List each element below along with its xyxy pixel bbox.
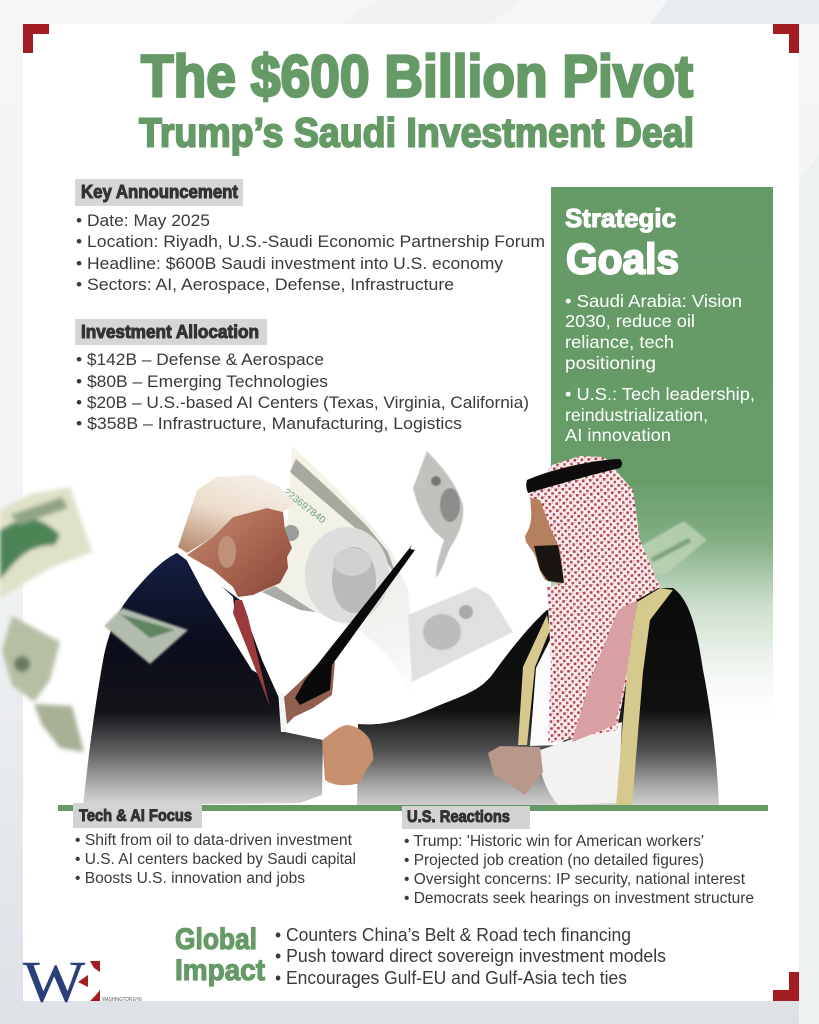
list: key announcement items: • Headline: $600B Saudi investment into U.S. economy xyxy=(76,255,504,273)
list: tech and ai items xyxy=(75,832,356,887)
list: us reactions items: • Trump: 'Historic win for American workers' xyxy=(404,833,704,850)
photo: saudi figure xyxy=(357,456,719,806)
figure: hair xyxy=(178,475,295,553)
list: investment allocation items: • $142B – Defense & Aerospace xyxy=(76,351,324,369)
green divider bar xyxy=(58,805,768,811)
small note over jacket xyxy=(104,608,188,664)
heading: key announcement xyxy=(75,179,243,206)
text: us goals: • U.S.: Tech leadership, xyxy=(565,384,755,404)
heading: tech and ai focus xyxy=(73,803,202,828)
subtitle: Trump’s Saudi Investment Deal xyxy=(139,110,694,156)
list: key announcement items: • Date: May 2025 xyxy=(76,212,210,230)
bill: top right note xyxy=(413,451,463,578)
heading: key announcement: Key Announcement xyxy=(81,182,238,202)
panel: us reactions xyxy=(402,806,754,907)
list: tech and ai items: • Shift from oil to data-driven investment xyxy=(75,832,353,849)
figure: red tie xyxy=(233,600,270,707)
heading: strategic goals: Goals xyxy=(566,236,679,284)
figure: shirt and collar xyxy=(185,557,257,673)
figure: ear xyxy=(218,536,236,568)
heading: global impact: Global xyxy=(175,923,257,956)
list: investment allocation items xyxy=(76,351,529,433)
figure: black robe and arm xyxy=(357,588,719,806)
figure: gold trim left xyxy=(518,615,550,745)
list: tech and ai items: • U.S. AI centers backed by Saudi capital xyxy=(75,851,356,868)
figure: hand xyxy=(488,746,543,795)
heading: strategic goals xyxy=(565,203,679,284)
figure: shemagh headdress xyxy=(527,456,660,743)
heading: us reactions: U.S. Reactions xyxy=(407,807,510,826)
figure: hand holding folder xyxy=(284,662,335,724)
text: us goals: reindustrialization, xyxy=(565,405,708,425)
heading: tech and ai focus: Tech & AI Focus xyxy=(79,806,192,825)
bill: large hundred dollar note: 223697840 xyxy=(281,487,328,526)
corner bracket: bottom right xyxy=(773,972,799,1001)
logo: washington eye: WASHINGTON EYE xyxy=(102,997,143,1003)
photo: flying dollar bills xyxy=(0,446,707,752)
corner bracket: top right xyxy=(773,24,799,53)
text: saudi goals: reliance, tech xyxy=(565,332,674,352)
panel: key announcement xyxy=(75,179,545,294)
heading: global impact xyxy=(175,923,265,987)
bill: bottom left blurred note xyxy=(34,704,84,752)
panel: strategic goals xyxy=(551,187,773,720)
list: us reactions items: • Democrats seek hearings on investment structure xyxy=(404,890,754,907)
list: us reactions items: • Oversight concerns: IP security, national interest xyxy=(404,871,746,888)
figure: folder xyxy=(295,545,415,705)
corner bracket: top left xyxy=(23,24,49,53)
heading: global impact: Impact xyxy=(175,954,265,987)
text: saudi goals: 2030, reduce oil xyxy=(565,311,695,331)
list: global impact items: • Push toward direct sovereign investment models xyxy=(275,946,666,966)
panel: tech and ai focus xyxy=(73,803,356,887)
text: saudi goals xyxy=(565,291,742,373)
figure: shemagh stripe band xyxy=(572,588,660,742)
text: us goals: AI innovation xyxy=(565,425,671,445)
figure: black agal headband xyxy=(526,459,622,493)
bill: left blurred note xyxy=(0,487,92,598)
list: global impact items: • Counters China’s Belt & Road tech financing xyxy=(275,925,631,945)
list: key announcement items: • Location: Riyadh, U.S.-Saudi Economic Partnership Forum xyxy=(76,233,545,251)
list: us reactions items: • Projected job creation (no detailed figures) xyxy=(404,852,704,869)
bill: green note behind headdress xyxy=(642,521,707,577)
figure: shirt cuff xyxy=(278,690,288,732)
list: key announcement items xyxy=(76,212,545,294)
list: investment allocation items: • $358B – Infrastructure, Manufacturing, Logistics xyxy=(76,415,462,433)
heading: strategic goals: Strategic xyxy=(565,203,676,233)
list: investment allocation items: • $20B – U.S.-based AI Centers (Texas, Virginia, California) xyxy=(76,394,529,412)
list: investment allocation items: • $80B – Emerging Technologies xyxy=(76,373,328,391)
text: saudi goals: • Saudi Arabia: Vision xyxy=(565,291,742,311)
logo: washington eye: W xyxy=(23,949,85,1014)
bill: lower left blurred note xyxy=(2,616,60,702)
logo: washington eye xyxy=(23,949,143,1014)
list: tech and ai items: • Boosts U.S. innovation and jobs xyxy=(75,870,305,887)
bill: large hundred dollar note xyxy=(260,446,414,700)
figure: face and neck xyxy=(187,508,292,597)
list: key announcement items: • Sectors: AI, Aerospace, Defense, Infrastructure xyxy=(76,276,454,294)
figure: beard xyxy=(534,545,565,583)
text: us goals xyxy=(565,384,755,445)
heading: investment allocation: Investment Allocation xyxy=(81,322,259,342)
list: global impact items: • Encourages Gulf-EU and Gulf-Asia tech ties xyxy=(275,968,627,988)
figure: gold trim right xyxy=(616,588,673,806)
list: us reactions items xyxy=(404,833,754,907)
figure: suit jacket xyxy=(83,553,323,806)
photo: trump figure xyxy=(83,475,415,806)
figure: white thobe xyxy=(530,620,600,746)
figure: sleeve xyxy=(540,722,622,805)
list: global impact items xyxy=(275,925,666,988)
figure: shaking hands xyxy=(322,725,373,785)
title: The $600 Billion Pivot xyxy=(141,44,693,110)
panel: investment allocation xyxy=(75,319,529,433)
figure: face xyxy=(525,480,565,585)
text: saudi goals: positioning xyxy=(565,353,656,373)
bill: centre right note xyxy=(408,587,513,682)
panel: global impact xyxy=(175,923,666,988)
